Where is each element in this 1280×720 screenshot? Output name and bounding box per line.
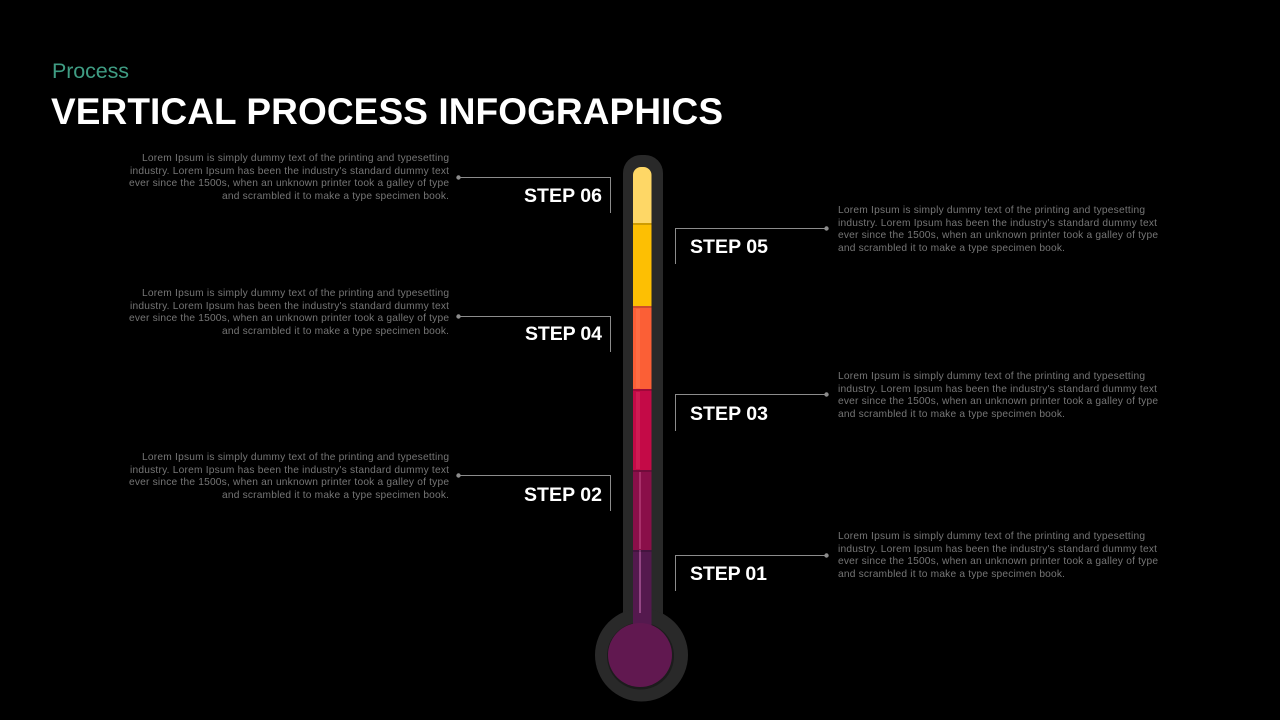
- step 03 label: STEP 03: [690, 403, 768, 425]
- step 04 label: STEP 04: [525, 323, 602, 345]
- step 04 description: industry. Lorem Ipsum has been the industry's standard dummy text: [130, 301, 449, 312]
- step 05: [676, 205, 1158, 264]
- step 01: [676, 531, 1158, 591]
- step 02 description: industry. Lorem Ipsum has been the industry's standard dummy text: [130, 465, 449, 476]
- step 02 connector: [458, 476, 610, 511]
- segment: step 06 pale yellow: [633, 167, 652, 223]
- step 02 description: ever since the 1500s, when an unknown printer took a galley of type: [129, 477, 449, 488]
- step 04 description: Lorem Ipsum is simply dummy text of the printing and typesetting: [142, 288, 449, 299]
- segment: step 04 orange: [633, 306, 652, 389]
- step 03 description: Lorem Ipsum is simply dummy text of the printing and typesetting: [838, 371, 1145, 382]
- step 02 description: and scrambled it to make a type specimen book.: [222, 490, 449, 501]
- step 06 description: ever since the 1500s, when an unknown printer took a galley of type: [129, 178, 449, 189]
- step 03 connector: [676, 394, 826, 431]
- step 05 description: industry. Lorem Ipsum has been the industry's standard dummy text: [838, 218, 1157, 229]
- tube highlight: [636, 309, 641, 613]
- title: VERTICAL PROCESS INFOGRAPHICS: [51, 91, 723, 132]
- subtitle: Process: Process: [52, 59, 129, 83]
- step 04 description: and scrambled it to make a type specimen book.: [222, 326, 449, 337]
- step 06 description: industry. Lorem Ipsum has been the industry's standard dummy text: [130, 166, 449, 177]
- step 05 connector: [676, 228, 826, 264]
- step 03: [676, 371, 1158, 431]
- step 02 description: Lorem Ipsum is simply dummy text of the printing and typesetting: [142, 452, 449, 463]
- step 05 description: and scrambled it to make a type specimen book.: [838, 243, 1065, 254]
- step 05 label: STEP 05: [690, 236, 768, 258]
- step 03 description: and scrambled it to make a type specimen book.: [838, 409, 1065, 420]
- step 03 dot: [824, 392, 829, 397]
- step 01 description: ever since the 1500s, when an unknown printer took a galley of type: [838, 556, 1158, 567]
- step 05 dot: [824, 226, 829, 231]
- segment: step 02 dark magenta: [633, 470, 652, 550]
- segment: step 05 yellow: [633, 223, 652, 306]
- step 06 description: Lorem Ipsum is simply dummy text of the printing and typesetting: [142, 153, 449, 164]
- step 06 label: STEP 06: [524, 185, 602, 207]
- thermometer outer casing: [595, 155, 688, 702]
- step 01 connector: [676, 556, 826, 591]
- bulb inner shadow: [607, 622, 674, 690]
- step 04 connector: [458, 316, 610, 352]
- step 06 connector: [458, 178, 610, 213]
- step 03 description: industry. Lorem Ipsum has been the industry's standard dummy text: [838, 384, 1157, 395]
- thermometer bulb: [608, 623, 672, 687]
- step 06: [129, 153, 610, 213]
- step 01 description: Lorem Ipsum is simply dummy text of the printing and typesetting: [838, 531, 1145, 542]
- step 01 dot: [824, 553, 829, 558]
- step 02 label: STEP 02: [524, 484, 602, 506]
- step 04 dot: [456, 314, 461, 319]
- step 06 dot: [456, 175, 461, 180]
- step 05 description: ever since the 1500s, when an unknown printer took a galley of type: [838, 230, 1158, 241]
- step 01 label: STEP 01: [690, 563, 767, 585]
- step 04: [129, 288, 610, 352]
- step 01 description: and scrambled it to make a type specimen book.: [838, 569, 1065, 580]
- segment shadows: [633, 223, 652, 552]
- step 02 dot: [456, 473, 461, 478]
- step 02: [129, 452, 610, 511]
- segment: step 01 plum: [633, 550, 652, 628]
- step 05 description: Lorem Ipsum is simply dummy text of the printing and typesetting: [838, 205, 1145, 216]
- step 04 description: ever since the 1500s, when an unknown printer took a galley of type: [129, 313, 449, 324]
- step 01 description: industry. Lorem Ipsum has been the industry's standard dummy text: [838, 544, 1157, 555]
- step 03 description: ever since the 1500s, when an unknown printer took a galley of type: [838, 396, 1158, 407]
- step 06 description: and scrambled it to make a type specimen book.: [222, 191, 449, 202]
- segment: step 03 crimson: [633, 389, 652, 470]
- thermometer: [595, 155, 688, 702]
